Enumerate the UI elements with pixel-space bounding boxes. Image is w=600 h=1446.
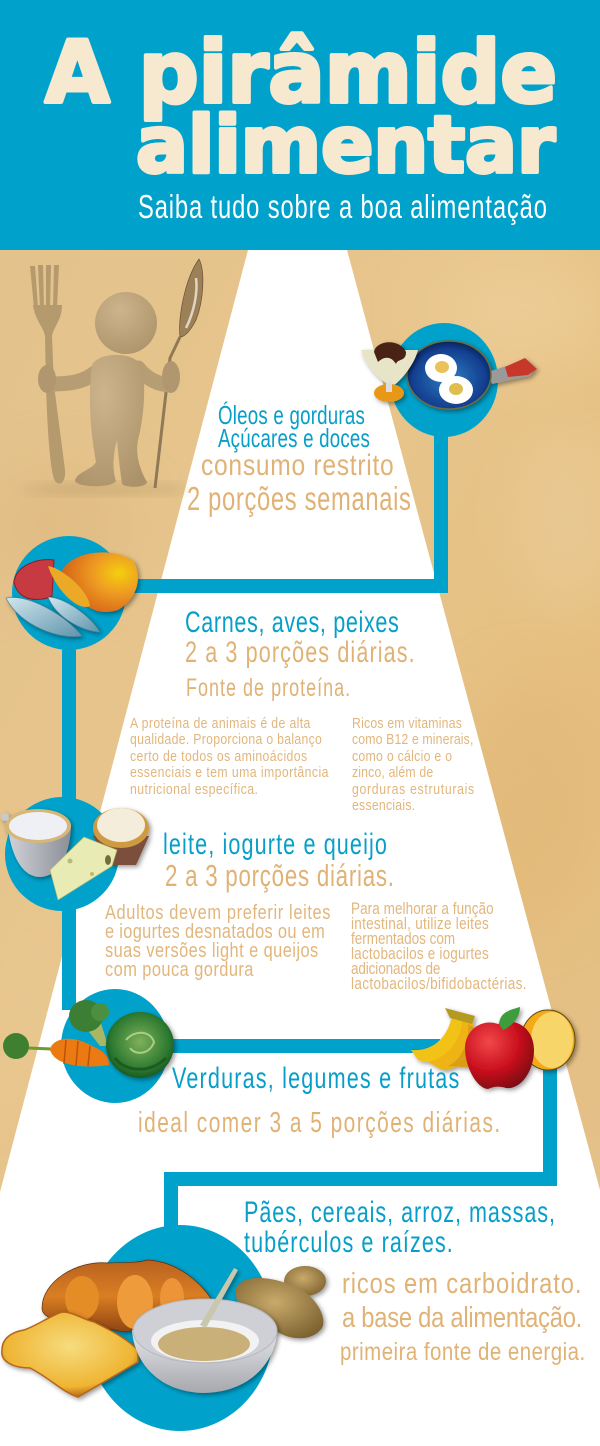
text block: vitamins detail: [352, 715, 474, 813]
text block: dairy advice: suas versões light e queijos: [105, 938, 318, 961]
text block: grains detail: [340, 1267, 585, 1365]
text block: grains detail: primeira fonte de energia.: [340, 1337, 585, 1365]
text block: protein detail: A proteína de animais é de alta: [130, 715, 311, 731]
text block: dairy advice: e iogurtes desnatados ou em: [105, 919, 325, 942]
title: alimentar: [136, 101, 556, 191]
text block: vitamins detail: como o cálcio e o: [352, 748, 452, 764]
fruits: [411, 1007, 575, 1089]
hands: [38, 361, 180, 393]
circle: meat, poultry, fish: [6, 536, 138, 650]
icon: carrot: [3, 1033, 109, 1066]
icon: chicken leg: [48, 566, 90, 607]
text block: meat heading: 2 a 3 porções diárias.: [185, 634, 415, 669]
circle: oils and sugars: [361, 323, 537, 437]
arms: [52, 368, 170, 385]
text block: probiotics detail: intestinal, utilize leites: [351, 915, 489, 933]
title: [45, 23, 557, 191]
text block: oils and sugars: 2 porções semanais: [187, 481, 411, 518]
text block: probiotics detail: [351, 900, 526, 993]
text block: probiotics detail: fermentados com: [351, 930, 455, 948]
blue connector lines: [62, 420, 557, 1242]
icon: lemon: [521, 1010, 575, 1070]
text block: dairy heading: leite, iogurte e queijo: [163, 826, 387, 861]
header band: [0, 0, 600, 250]
text block: dairy heading: [163, 826, 394, 893]
icon: milk mug: [1, 809, 71, 877]
icon: broccoli: [69, 1000, 109, 1046]
body: [75, 355, 147, 487]
text block: vegetables: ideal comer 3 a 5 porções diárias.: [138, 1107, 500, 1139]
text block: meat heading: Fonte de proteína.: [186, 673, 350, 702]
figure with fork and spoon: [20, 259, 203, 493]
icon: toast: [2, 1312, 138, 1397]
icon: cereal bowl: [132, 1268, 277, 1393]
text block: vitamins detail: Ricos em vitaminas: [352, 715, 462, 731]
circle: vegetables: [3, 989, 174, 1103]
circle: dairy: [1, 797, 149, 911]
text block: grains heading: tubérculos e raízes.: [244, 1224, 453, 1259]
text block: vitamins detail: como B12 e minerais,: [352, 731, 473, 747]
icon: sundae: [361, 342, 418, 402]
icon: chicken: [62, 552, 138, 612]
text block: dairy advice: [105, 900, 331, 980]
text block: grains heading: [244, 1194, 555, 1259]
icon: bananas: [411, 1008, 478, 1070]
text block: vitamins detail: essenciais.: [352, 797, 415, 813]
text block: oils and sugars: [187, 400, 411, 518]
text block: dairy advice: Adultos devem preferir leites: [105, 900, 331, 923]
icon: apple: [465, 1007, 534, 1089]
text block: vegetables: [138, 1060, 500, 1139]
text block: probiotics detail: lactobacilos/bifidobactérias.: [351, 975, 526, 993]
text block: grains detail: a base da alimentação.: [342, 1301, 582, 1334]
text block: protein detail: certo de todos os aminoácidos: [130, 748, 307, 764]
text block: oils and sugars: Açúcares e doces: [218, 423, 370, 453]
icon: fish: [6, 597, 100, 637]
text block: dairy heading: 2 a 3 porções diárias.: [165, 858, 394, 893]
subtitle: Saiba tudo sobre a boa alimentação: [138, 189, 547, 226]
icon: bread loaf: [42, 1260, 212, 1332]
spoon: [155, 259, 203, 488]
icon: cheese wedge: [50, 837, 117, 900]
circle: grains: [2, 1225, 326, 1431]
fork: [30, 265, 65, 484]
text block: vitamins detail: zinco, além de: [352, 764, 434, 780]
icon: lettuce: [106, 1012, 174, 1078]
text block: oils and sugars: consumo restrito: [201, 448, 394, 482]
text block: vitamins detail: gorduras estruturais: [352, 781, 474, 797]
text block: grains heading: Pães, cereais, arroz, massas,: [244, 1194, 555, 1229]
text block: probiotics detail: Para melhorar a função: [351, 900, 494, 918]
text block: protein detail: nutricional específica.: [130, 781, 258, 797]
head: [95, 292, 157, 354]
text block: dairy advice: com pouca gordura: [105, 957, 254, 980]
icon: frying pan with eggs: [407, 341, 537, 409]
text block: probiotics detail: adicionados de: [351, 960, 440, 978]
text block: protein detail: [130, 715, 329, 797]
title: A pirâmide: [45, 23, 557, 123]
icon: red meat: [14, 560, 54, 599]
text block: probiotics detail: lactobacilos e iogurtes: [351, 945, 489, 963]
text block: protein detail: qualidade. Proporciona o balanço: [130, 731, 322, 747]
text block: meat heading: Carnes, aves, peixes: [185, 604, 399, 639]
text block: vegetables: Verduras, legumes e frutas: [172, 1060, 459, 1095]
text block: oils and sugars: Óleos e gorduras: [218, 400, 365, 430]
icon: cupcake: [93, 808, 149, 865]
text block: protein detail: essenciais e tem uma importância: [130, 764, 329, 780]
text block: meat heading: [185, 604, 415, 702]
text block: grains detail: ricos em carboidrato.: [342, 1267, 581, 1300]
icon: potatoes: [236, 1266, 326, 1338]
